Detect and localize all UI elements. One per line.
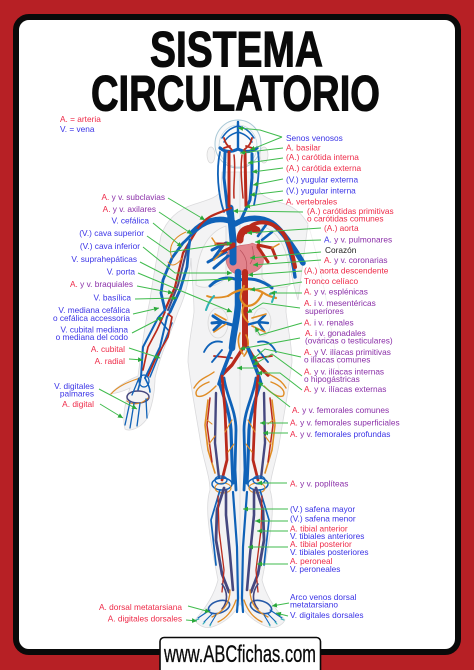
label: senos venosos: Senos venosos [286,133,343,143]
label: iliacas internas: o hipogástricas [304,374,360,384]
label: mesentericas: superiores [305,306,344,316]
title [91,20,380,122]
label: mesentericas [304,298,376,316]
abdominal branches [206,286,276,356]
label: esplenicas: A. y v. esplénicas [304,286,368,296]
label: gonadales: A. i v. gonadales [305,328,366,338]
label: femorales comunes: A. y v. femorales comunes [292,405,389,415]
organ outlines: lungs and kidneys [196,226,290,338]
title: CIRCULATORIO [91,64,380,122]
label: digitales palmares: palmares [60,388,94,398]
label: popliteas: A. y v. poplíteas [290,478,348,488]
label: safena mayor: (V.) safena mayor [290,504,355,514]
label: porta: V. porta [107,266,135,276]
label: iliacas primitivas: o ilíacas comunes [304,354,370,364]
label: tibial posterior: A. tibial posterior [290,539,352,549]
label: vertebrales: A. vertebrales [286,196,337,206]
legend: V. = vena [60,124,95,134]
label: carotida interna: (A.) carótida interna [286,152,359,162]
website badge [160,638,320,670]
label: carotida externa: (A.) carótida externa [286,163,362,173]
arm vessels [111,230,197,428]
label: basilar: A. basilar [286,142,321,152]
label: cubital: A. cubital [91,344,125,354]
label: mesentericas: A. i v. mesentéricas [304,298,376,308]
label: digitales dorsales: A. digitales dorsales [108,614,182,624]
label: tibial anterior [290,524,364,541]
label: yugular externa: (V.) yugular externa [286,174,358,184]
legend: A. = arteria [60,114,101,124]
label: mediana cefalica [53,305,130,323]
label: renales: A. i v. renales [304,318,354,328]
label: arco venoso: metatarsiano [290,600,338,610]
label: tronco celiaco: Tronco celíaco [304,276,358,286]
label: mediana cefalica: o cefálica accessoria [53,313,130,323]
label: iliacas externas: A. y v. ilíacas externas [304,384,386,394]
label: gonadales: (ováricas o testiculares) [305,336,393,346]
label: cava inferior: (V.) cava inferior [80,241,140,251]
label: tibial posterior [290,539,369,557]
label: aorta descendente: (A.) aorta descendente [304,266,389,276]
label: digitales palmares: V. digitales [54,381,94,391]
label: subclavias: A. y v. subclavias [102,192,165,202]
label: cubital mediana [56,324,128,342]
label: carotidas primitivas: (A.) carótidas primitivas [307,206,394,216]
label: aorta: (A.) aorta [324,223,359,233]
label: gonadales [305,328,393,346]
label: basilica: V. basílica [93,292,131,302]
label: digitales dorsales: V. digitales dorsales [290,610,364,620]
label: radial: A. radial [95,356,125,366]
label: cubital mediana: o mediana del codo [56,332,128,342]
label: safena menor: (V.) safena menor [290,514,356,524]
label: iliacas internas [304,366,384,384]
heart [226,243,263,275]
label: iliacas internas: A. y v. ilíacas internas [304,366,384,376]
label: iliacas primitivas: A. y V. ilíacas primitivas [304,347,391,357]
label: peroneal: A. peroneal [290,556,333,566]
label: digital: A. digital [62,399,94,409]
label: peroneal [290,556,340,574]
label: femorales profundas: A. y v. femorales profundas [290,429,390,439]
label: tibial posterior: V. tibiales posteriores [290,547,369,557]
label: pulmonares: A. y v. pulmonares [324,234,392,244]
label: braquiales: A. y v. braquiales [70,279,133,289]
label: digitales palmares [54,381,94,398]
website badge: www.ABCfichas.com [163,641,316,668]
callout arrows: right side [233,128,321,616]
label: cava superior: (V.) cava superior [79,228,144,238]
anatomical figure [110,120,342,628]
label: axilares: A. y v. axilares [103,204,156,214]
label: arco venoso: Arco venos dorsal [290,592,357,602]
callout arrows: left side [99,198,233,621]
body silhouette [110,120,342,628]
label: arco venoso [290,592,357,610]
label: carotidas primitivas: o carótidas comunes [307,214,384,224]
label: cefalica: V. cefálica [111,216,149,226]
leg vessels [194,341,238,626]
labels: right side [286,133,400,620]
label: coronarias: A. y v. coronarias [324,255,387,265]
labels: left side [53,192,182,624]
label: mediana cefalica: V. mediana cefálica [58,305,130,315]
legend [60,114,101,134]
label: femorales superficiales: A. y v. femorales superficiales [290,418,400,428]
label: dorsal metatarsiana: A. dorsal metatarsiana [99,602,182,612]
label: corazon: Corazón [325,245,357,255]
title: SISTEMA [150,20,323,78]
label: carotidas primitivas [307,206,394,224]
label: suprahepaticas: V. suprahepáticas [71,254,137,264]
veins: head, neck and trunk [192,122,303,348]
label: yugular interna: (V.) yugular interna [286,186,356,196]
label: tibial anterior: V. tibiales anteriores [290,531,364,541]
label: iliacas primitivas [304,347,391,364]
right leg vessels (mirror) [242,341,286,626]
label: tibial anterior: A. tibial anterior [290,524,348,534]
label: cubital mediana: V. cubital mediana [60,324,128,334]
arteries: head, neck and trunk [165,138,295,375]
label: peroneal: V. peroneales [290,564,340,574]
